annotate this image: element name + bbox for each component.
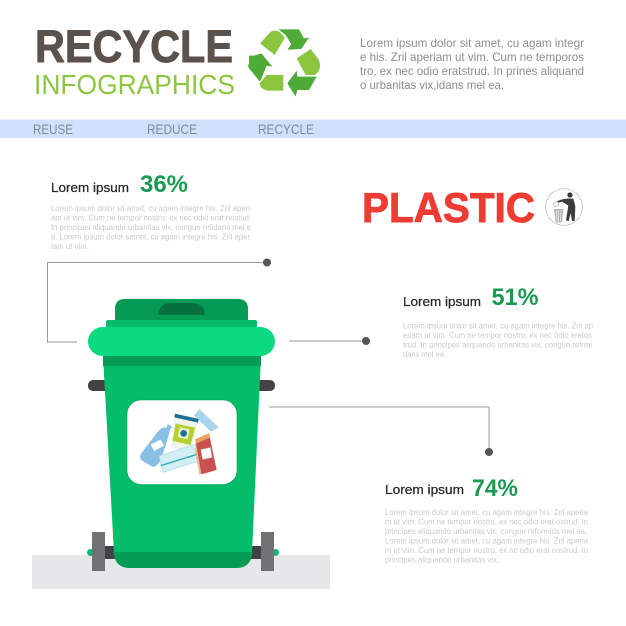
navigation band: REDUCE bbox=[147, 121, 197, 137]
title: recycle infographics: RECYCLE bbox=[35, 21, 233, 72]
text block: 74%: m ut vim. Cum ne tempor nostro, ex nc odio erat nostrud. In bbox=[385, 546, 588, 555]
text block: 51%: trud. In principes aliquando urbanitas vix, congue refrmi bbox=[403, 340, 592, 350]
text block: 36%: a. Lorem ipsum dolor samet, cu agam integre his. Zril aper bbox=[51, 232, 250, 242]
header paragraph bbox=[360, 36, 584, 92]
text block: 51% bbox=[403, 284, 594, 359]
text block: 51%: dans mel ea. bbox=[403, 350, 446, 359]
recycling bin bbox=[87, 299, 279, 571]
connector: 36% callout to bin bbox=[48, 258, 271, 342]
navigation band: RECYCLE bbox=[258, 121, 314, 137]
title: recycle infographics: INFOGRAPHICS bbox=[34, 69, 235, 100]
text block: 36%: Lorem ipsum dolor sit amet, cu agam integre his. Zril aperi bbox=[51, 204, 250, 213]
icon: recycle symbol bbox=[248, 29, 320, 97]
bin rim bbox=[88, 320, 275, 356]
title: recycle infographics bbox=[34, 21, 235, 100]
text block: 74%: principes aliquando urbanitas vix, congue reformids mel ea. bbox=[385, 527, 587, 536]
bin base shade bbox=[114, 552, 252, 568]
connector: 74% callout to bin bbox=[269, 407, 493, 456]
bin axle and wheels bbox=[87, 532, 279, 571]
text block: 74%: m ut vim. Cum ne tempor nostro, ex nec odio erat ostrud. In bbox=[385, 518, 588, 526]
navigation band bbox=[0, 120, 626, 138]
connector: 51% callout to bin bbox=[289, 337, 370, 345]
text block: 74%: Lorem ipsum bbox=[385, 482, 464, 497]
icon: person throwing trash in bin bbox=[546, 189, 582, 225]
text block: 74%: 74% bbox=[472, 475, 518, 502]
icon: light blue bottle cap piece bbox=[194, 409, 219, 432]
bin lid bbox=[115, 299, 248, 320]
text block: 51%: Lorem ipsum bbox=[403, 294, 481, 309]
navigation band: REUSE bbox=[33, 121, 73, 137]
text block: 74% bbox=[385, 475, 589, 564]
bin label with plastic items bbox=[127, 400, 237, 484]
ground shadow bbox=[32, 555, 330, 589]
header paragraph: e his. Zril aperiam ut vim. Cum ne temporos bbox=[360, 50, 584, 64]
text block: 51%: Lorem ipsum dolor sit amet, cu agam integre his. Zril ap bbox=[403, 322, 594, 330]
text block: 51%: eriam ut vim. Cum ne tempor nostro, ex nec odio eratos bbox=[403, 331, 592, 340]
text block: 74%: Lorem ipsum dolor sit amet, cu agam integre his. Zril aperia bbox=[385, 536, 589, 546]
text block: 36%: In principes aliquando urbanitas vix, congue refidans mel e bbox=[51, 223, 252, 232]
text block: 51%: 51% bbox=[492, 284, 538, 311]
icon: water bottle bbox=[140, 424, 172, 467]
bin band shade bbox=[103, 355, 261, 366]
bin side handles bbox=[88, 380, 275, 391]
text block: 36%: am ut vim. Cum ne tempor nostro, ex nec odio erat nostud. bbox=[51, 214, 251, 222]
header paragraph: tro, ex nec odio eratstrud. In prines aliquand bbox=[360, 64, 584, 78]
text block: 74%: Lorem ipsum dolor sit amet, cu agam integre his. Zril aperia bbox=[385, 508, 589, 517]
text block: 36% bbox=[51, 171, 252, 251]
text block: 36%: 36% bbox=[140, 171, 188, 198]
heading: plastic: PLASTIC bbox=[362, 184, 535, 231]
bin body bbox=[103, 356, 261, 568]
text block: 36%: Lorem ipsum bbox=[51, 180, 129, 195]
icon: juice carton bbox=[195, 433, 217, 474]
text block: 74%: principes aliquando urbanitas vix. bbox=[385, 556, 499, 564]
text block: 36%: iam ut vim. bbox=[51, 242, 89, 251]
header paragraph: Lorem ipsum dolor sit amet, cu agam integr bbox=[360, 36, 584, 50]
icon: yogurt cup bbox=[171, 414, 199, 452]
icon: blister tray bbox=[159, 444, 202, 472]
header paragraph: o urbanitas vix,idans mel ea. bbox=[360, 78, 504, 92]
